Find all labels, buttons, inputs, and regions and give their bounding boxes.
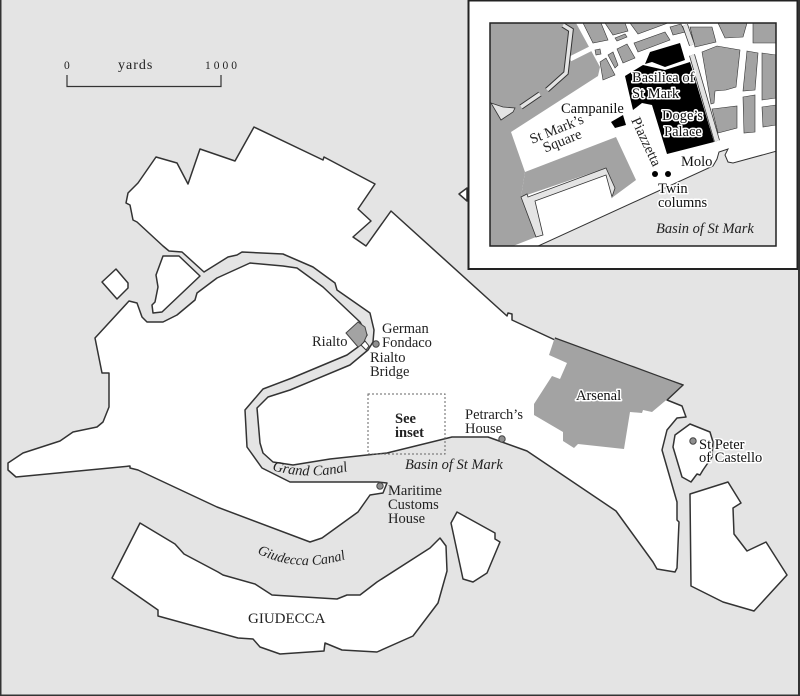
- dotted inset locator: [368, 394, 445, 454]
- label: Campanile: Campanile: [561, 101, 624, 117]
- label: Molo: Molo: [681, 154, 712, 170]
- label: Petrarch's House: Petrarch’s: [465, 407, 523, 423]
- label: Doge's Palace: Palace: [664, 124, 702, 140]
- Rialto district: [346, 322, 367, 347]
- canal north of the square: [521, 25, 571, 107]
- square, piazzetta, molo and street ground: [511, 23, 776, 246]
- quay canal strip: [521, 168, 615, 237]
- island: San Giorgio: [451, 512, 500, 582]
- building: Campanile: [611, 115, 626, 128]
- island: northern triangle: [152, 256, 200, 313]
- island: St Peter of Castello: [673, 424, 713, 482]
- western and southern city land: [8, 263, 387, 542]
- label: Maritime Customs House: Customs: [388, 497, 439, 513]
- Arsenal area: [534, 337, 683, 449]
- island: Sant'Elena: [690, 482, 787, 611]
- palace canal strip: [685, 25, 717, 141]
- label: Twin columns: Twin: [658, 181, 688, 197]
- marker: German Fondaco: [373, 341, 379, 347]
- island: Giudecca: [112, 523, 447, 654]
- block south of the square: [521, 137, 636, 197]
- Rialto Bridge: [361, 341, 369, 350]
- city blocks: [583, 23, 776, 133]
- label: Rialto: Rialto: [312, 334, 347, 350]
- label: St Mark's Square: Square: [541, 126, 584, 156]
- label: Basin of St Mark: Basin of St Mark: [405, 457, 503, 473]
- column left: [652, 171, 658, 177]
- label: Giudecca Canal: Giudecca Canal: [258, 546, 345, 566]
- label: Basilica of St Mark: Basilica of: [632, 70, 694, 86]
- scale bar: 0: [64, 60, 70, 72]
- label: Twin columns: columns: [658, 195, 707, 211]
- label: Basilica of St Mark: St Mark: [632, 86, 680, 102]
- inset map: [490, 23, 777, 247]
- scale bar: yards: [118, 58, 153, 73]
- building: north wing: [645, 43, 685, 67]
- Arsenal area: Arsenal: [576, 388, 621, 404]
- inset panel: St Mark's area: [468, 0, 798, 269]
- label: Grand Canal: Grand Canal: [274, 461, 348, 476]
- label: Petrarch's House: House: [465, 421, 502, 437]
- label: Piazzetta: Piazzetta: [627, 115, 664, 170]
- northern and eastern city land: [126, 127, 686, 572]
- label: Maritime Customs House: Maritime: [388, 483, 442, 499]
- label: Basin of St Mark (inset): Basin of St Mark: [656, 221, 754, 237]
- island: small diamond: [102, 269, 128, 299]
- label: See inset: inset: [395, 425, 424, 441]
- label: GIUDECCA: GIUDECCA: [248, 611, 326, 627]
- marker: Petrarch's House: [499, 436, 505, 442]
- label: Maritime Customs House: House: [388, 511, 425, 527]
- island: sliver behind inset: [459, 188, 467, 201]
- label: German Fondaco: Fondaco: [382, 335, 432, 351]
- label: St Peter of Castello: St Peter: [699, 437, 745, 453]
- label: German Fondaco: German: [382, 321, 429, 337]
- label: See inset: See: [395, 411, 416, 427]
- building: Basilica and Doge's Palace: [625, 62, 714, 154]
- label: St Peter of Castello: of Castello: [699, 450, 762, 466]
- marker: St Peter of Castello: [690, 438, 696, 444]
- canal mouth: [491, 103, 515, 120]
- map of Venice: [7, 126, 788, 655]
- label: St Mark's Square: St Mark’s: [528, 111, 586, 148]
- label: Rialto Bridge: Rialto: [370, 350, 405, 366]
- marker: Maritime Customs House: [377, 483, 383, 489]
- label: Rialto Bridge: Bridge: [370, 364, 409, 380]
- column right: [665, 171, 671, 177]
- scale bar: [64, 58, 240, 86]
- label: St Mark's Square: [528, 111, 591, 160]
- scale bar: 1000: [205, 60, 240, 72]
- label: Doge's Palace: Doge’s: [662, 108, 703, 124]
- street west of the canal: [570, 48, 592, 59]
- basin water: [536, 149, 777, 247]
